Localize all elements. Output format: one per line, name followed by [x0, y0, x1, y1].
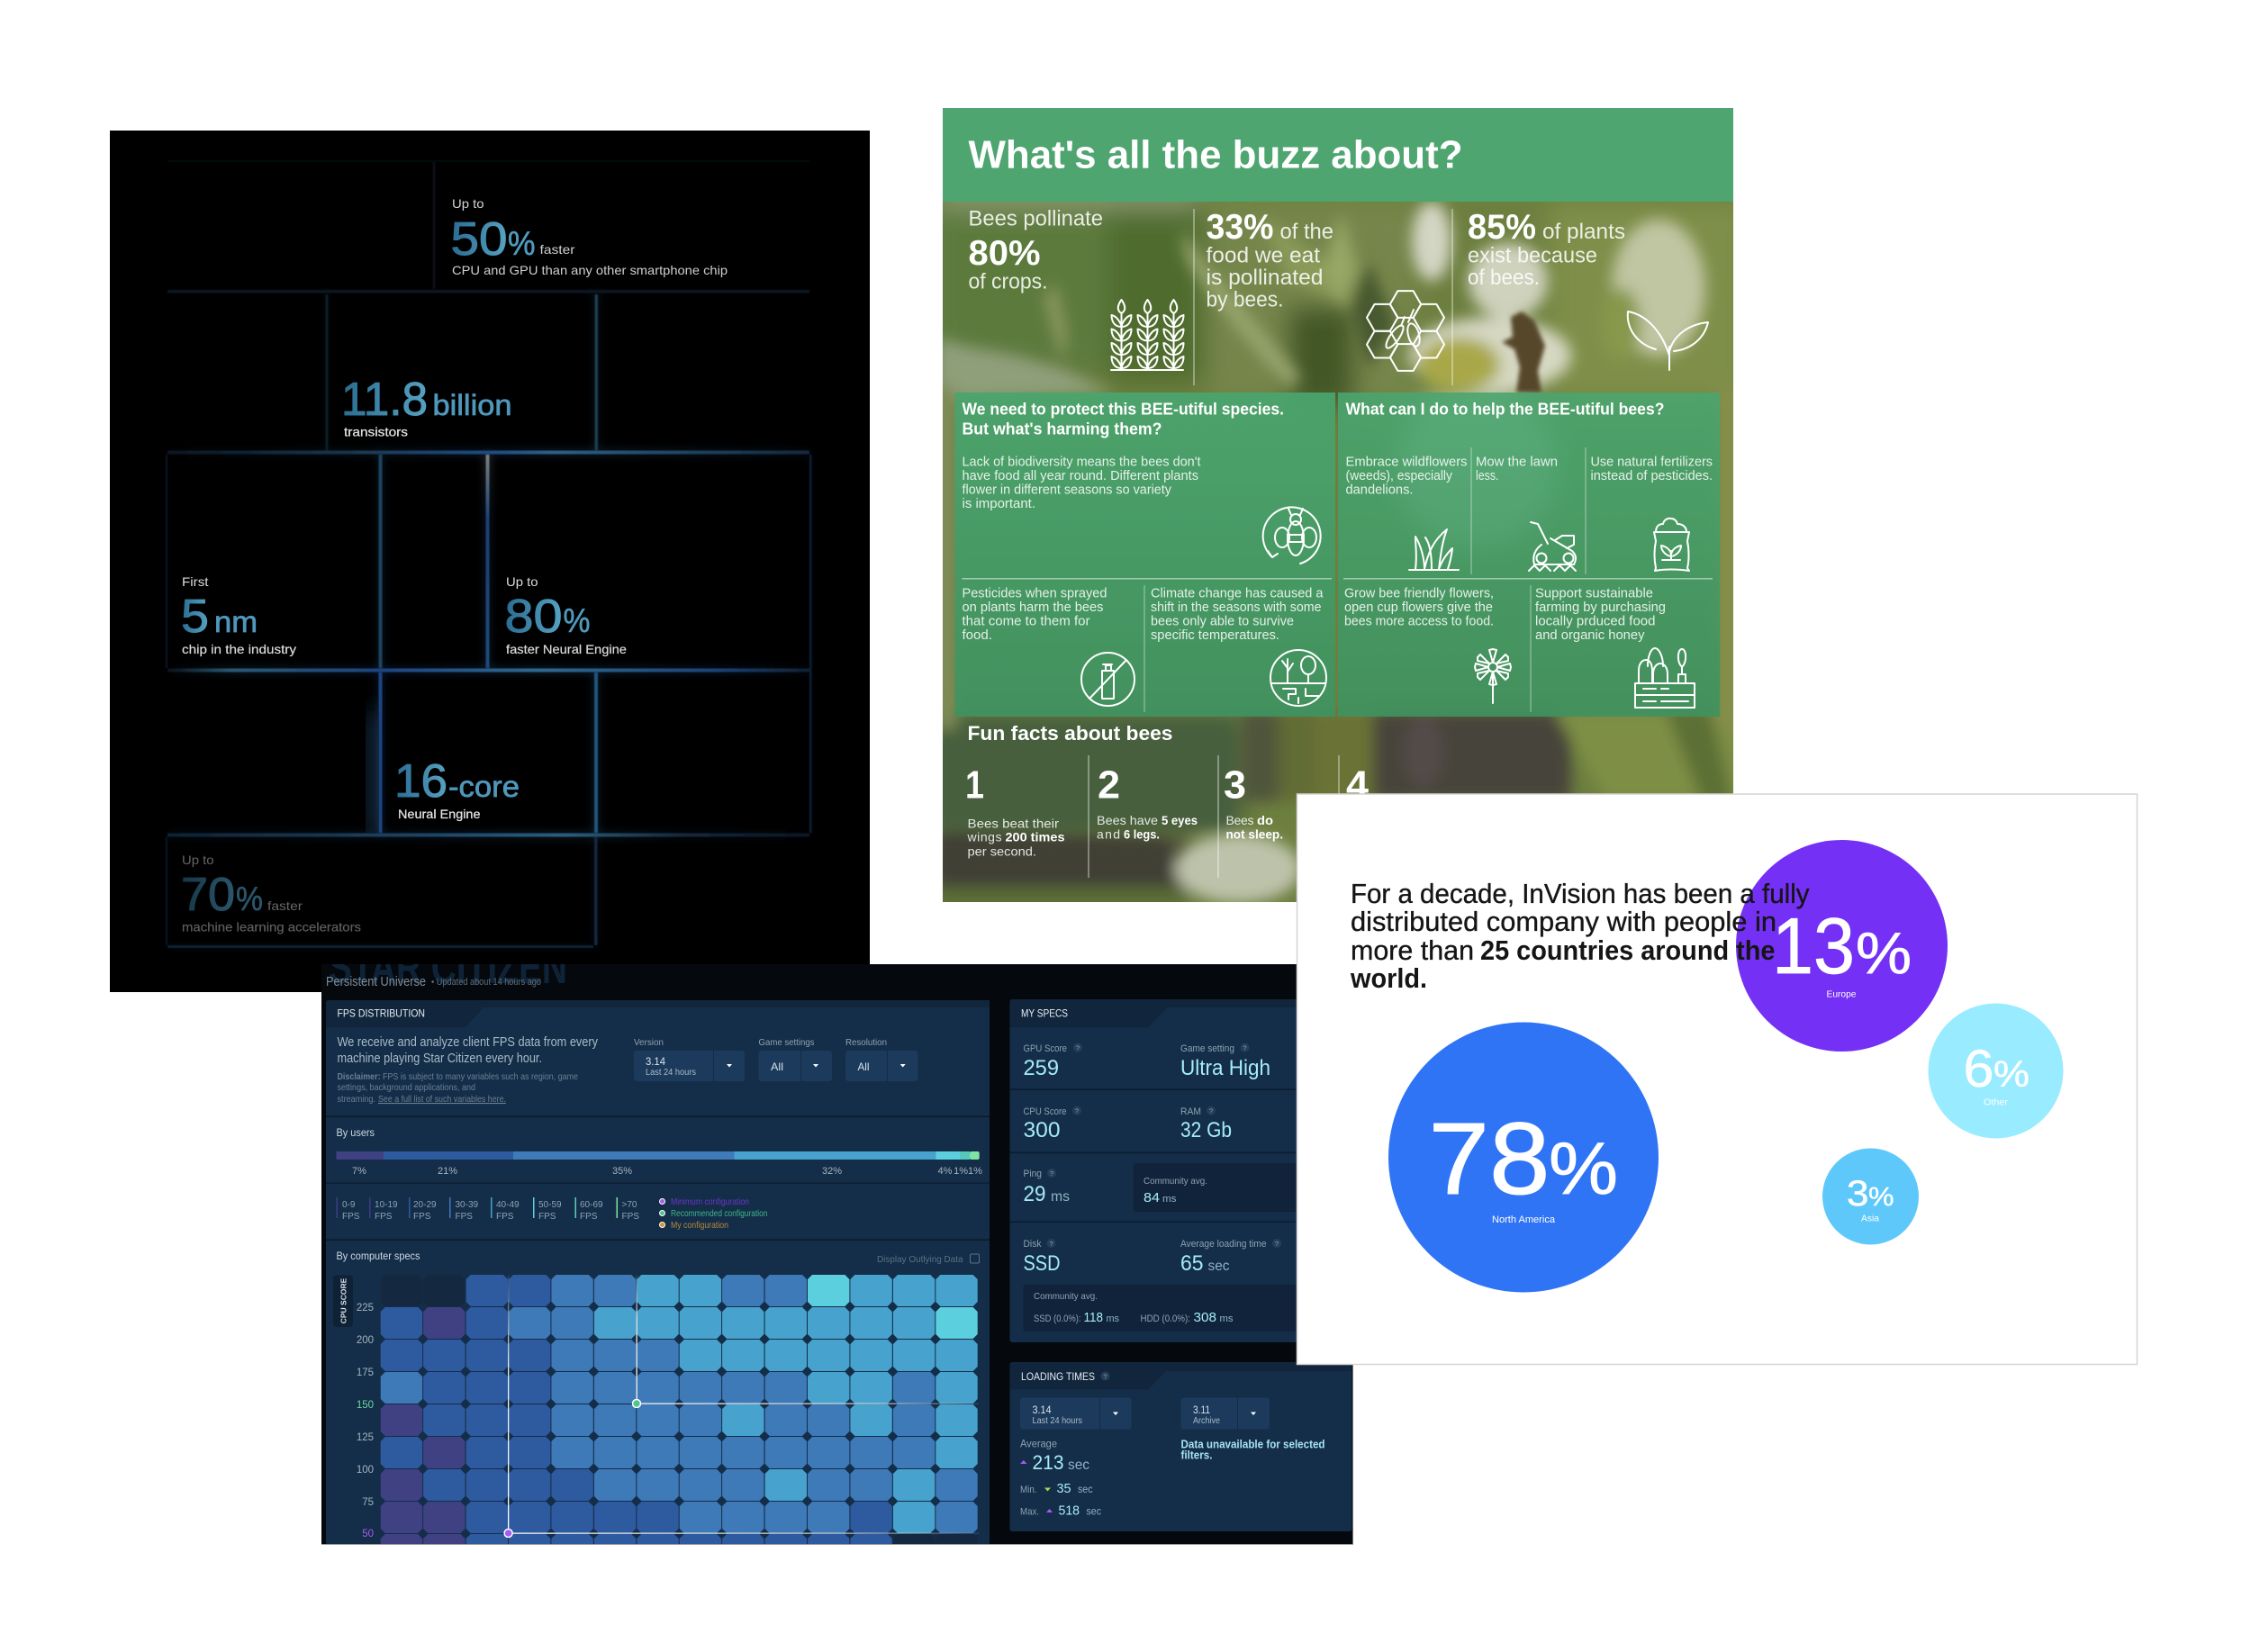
spec: average loading time: ?: [1275, 1240, 1279, 1248]
chart: by users stacked bar: 1%1%: [954, 1166, 982, 1177]
intro statement: world.: [1350, 962, 1427, 994]
chart: by computer specs heatmap: 225: [357, 1303, 374, 1313]
stat: 80 percent of crops: 80%: [969, 234, 1041, 273]
circle: Other 6 percent: Other: [1984, 1098, 2009, 1107]
spec: CPU score: ?: [1075, 1107, 1079, 1115]
text: natural fertilizers: [1590, 454, 1713, 483]
circle: Asia 3 percent: [1822, 1149, 1919, 1244]
stat: 80 percent: 80: [504, 591, 562, 643]
spec: CPU score: [1024, 1106, 1081, 1137]
stat: first 5 nm: nm: [214, 605, 258, 638]
circle: Other 6 percent: %: [1993, 1053, 2030, 1095]
stat: first 5 nm: [181, 574, 296, 656]
stat: 33 percent of food: by bees.: [1207, 288, 1284, 311]
fact 3: Bees: [1226, 813, 1253, 827]
legend: configurations: Minimum configuration: [671, 1196, 749, 1207]
stat: 80 percent: Up to: [506, 574, 538, 589]
intro text: Disclaimer: FPS is subject to many variables such as region, game: [337, 1071, 578, 1082]
intro statement: more than: [1351, 934, 1474, 966]
circle: North America 78 percent: %: [1549, 1128, 1618, 1210]
loading stats: [1020, 1439, 1101, 1518]
chart: by users stacked bar: 21%: [438, 1166, 457, 1177]
community average ping: [1134, 1163, 1297, 1212]
data unavailable note: [1181, 1440, 1324, 1458]
spec: CPU score: CPU Score: [1023, 1106, 1066, 1117]
icon: fertilizer bag: [1654, 519, 1689, 571]
filter: game settings: All: [771, 1061, 783, 1073]
intro text: settings, background applications, and: [337, 1082, 475, 1093]
spec: disk: Disk: [1023, 1239, 1042, 1250]
stat: 33 percent of food: 33%: [1207, 208, 1273, 247]
panel: loading times: [1010, 1362, 1352, 1531]
intro text: streaming.: [337, 1094, 375, 1105]
text: climate change: specific temperatures.: [1151, 627, 1279, 643]
legend: FPS ranges: >70: [621, 1200, 637, 1210]
filter: game settings: [758, 1037, 832, 1081]
chart: by computer specs heatmap: By computer specs: [337, 1250, 420, 1262]
page title: Persistent Universe: [326, 974, 426, 989]
fact 1: 200 times: [1005, 830, 1065, 844]
fact 1: wings: [967, 830, 1001, 844]
legend: FPS ranges: 20-29: [413, 1200, 437, 1210]
panel: InVision distributed company: [1297, 794, 2138, 1365]
spec: ping: ?: [1050, 1169, 1053, 1178]
panel: FPS distribution: FPS DISTRIBUTION: [337, 1007, 425, 1019]
legend: FPS ranges: 60-69: [580, 1200, 603, 1210]
text: sustainable farming: and organic honey: [1535, 627, 1645, 643]
text: wildflowers: dandelions.: [1345, 483, 1414, 497]
text: sustainable farming: [1535, 585, 1666, 643]
icon: bee cycle: [1263, 507, 1321, 564]
stat: 70 percent (dim): Up to: [182, 853, 214, 867]
heading: We need to protect this BEE-utiful species.: [962, 400, 1284, 418]
filter: version: 3.14: [646, 1055, 665, 1068]
text: pesticides: food.: [962, 627, 992, 643]
legend: FPS ranges: 30-39: [456, 1200, 479, 1210]
legend: FPS ranges: FPS: [621, 1212, 639, 1222]
fact 1: [965, 763, 1065, 859]
legend: FPS ranges: 10-19: [375, 1200, 398, 1210]
page title: STAR CITIZEN: [329, 942, 567, 994]
text: pesticides: [962, 585, 1107, 643]
filter: resolution: [845, 1037, 918, 1081]
panel: chip specifications: [110, 131, 870, 992]
heading: [962, 400, 1284, 438]
legend: configurations: [659, 1196, 768, 1231]
fact 2: [1097, 763, 1198, 841]
loading stats: 35: [1057, 1481, 1071, 1496]
intro text: We receive and analyze client FPS data from every: [337, 1034, 598, 1050]
stat: 16-core neural engine: Neural Engine: [398, 807, 481, 821]
text: pesticides: Pesticides when sprayed: [962, 585, 1107, 601]
chart: by users stacked bar: By users: [337, 1126, 375, 1139]
fact 4: 4: [1346, 763, 1370, 807]
text: biodiversity: [962, 454, 1201, 511]
chart: by computer specs heatmap: Display Outlying Data: [877, 1254, 963, 1265]
spec: disk: ?: [1049, 1240, 1053, 1248]
legend: FPS ranges: FPS: [342, 1212, 360, 1222]
filter: version: [634, 1037, 745, 1081]
fact 3: [1224, 763, 1283, 841]
text: pesticides: on plants harm the bees: [962, 600, 1104, 615]
panel: what's harming bees: [954, 393, 1335, 717]
icon: climate globe: [1270, 650, 1326, 706]
dropdown: version 3.14: 3.14: [1032, 1404, 1052, 1416]
stat: 50 percent: 50: [450, 213, 508, 266]
legend: FPS ranges: 40-49: [496, 1200, 520, 1210]
spec: average loading time: 65: [1180, 1251, 1203, 1276]
icon: honeycomb bee: [1367, 291, 1444, 371]
chart: by users stacked bar: 32%: [822, 1166, 842, 1177]
data unavailable note: Data unavailable for selected: [1181, 1437, 1325, 1451]
icon: grass: [1409, 529, 1459, 570]
chart: by users stacked bar: 4%: [938, 1166, 953, 1177]
dropdown: version 3.11: [1181, 1397, 1270, 1430]
icon: wheat: [1111, 300, 1183, 370]
chart: by computer specs heatmap: 200: [357, 1335, 374, 1346]
text: grow flowers: Grow bee friendly flowers,: [1344, 585, 1494, 601]
dropdown: version 3.14: [1020, 1397, 1131, 1430]
circle: North America 78 percent: [1388, 1023, 1659, 1293]
stat text: Europe: [1772, 901, 1912, 999]
text: mow less: less.: [1476, 468, 1498, 483]
spec: RAM: 32 Gb: [1180, 1118, 1232, 1142]
loading stats: Average: [1020, 1439, 1057, 1449]
text: sustainable farming: Support sustainable: [1535, 585, 1653, 601]
spec: average loading time: Average loading time: [1180, 1239, 1266, 1250]
intro statement: [1350, 878, 1810, 994]
title: What's all the buzz about?: [969, 133, 1462, 176]
legend: configurations: My configuration: [671, 1220, 728, 1231]
intro text: machine playing Star Citizen every hour.: [337, 1051, 542, 1066]
text: biodiversity: is important.: [962, 496, 1035, 511]
spec: game setting: [1180, 1043, 1270, 1080]
fun facts about bees: [965, 722, 1370, 878]
text: wildflowers: Embrace wildflowers: [1345, 454, 1468, 470]
text: sustainable farming: farming by purchasing: [1535, 600, 1666, 615]
legend: FPS ranges: FPS: [375, 1212, 393, 1222]
panel: my specs: [1010, 999, 1297, 1342]
stat: 16-core neural engine: 16: [394, 755, 447, 808]
chart: by computer specs heatmap: 75: [362, 1497, 374, 1508]
legend: FPS ranges: [337, 1197, 639, 1219]
stat: 80 percent of crops: Bees pollinate: [969, 207, 1103, 230]
text: grow flowers: open cup flowers give the: [1344, 600, 1493, 615]
stat: 16-core neural engine: -core: [448, 770, 520, 803]
stat: 50 percent: Up to: [452, 196, 484, 211]
intro statement: distributed company with people in: [1351, 906, 1776, 937]
stat text: Europe: 13: [1772, 901, 1855, 990]
chart: by computer specs heatmap: CPU SCORE: [339, 1277, 348, 1323]
spec: disk: [1024, 1239, 1060, 1270]
circle: Other 6 percent: [1929, 1003, 2064, 1138]
stat: 50 percent: %: [508, 225, 535, 262]
community average ping: ms: [1162, 1194, 1177, 1205]
stat: 16-core neural engine: [394, 755, 520, 821]
stat: first 5 nm: 5: [181, 591, 209, 643]
fact 1: 1: [965, 763, 984, 807]
icon: seedling: [1628, 311, 1708, 370]
header bar: [943, 108, 1733, 202]
legend: FPS ranges: 0-9: [342, 1200, 356, 1210]
community average disk: Community avg.: [1034, 1291, 1098, 1302]
filter: version: Last 24 hours: [646, 1068, 696, 1078]
panel: my specs: MY SPECS: [1021, 1007, 1068, 1019]
circle: North America 78 percent: North America: [1492, 1214, 1556, 1225]
circle: Asia 3 percent: Asia: [1861, 1214, 1879, 1224]
chart: by users stacked bar: 35%: [612, 1166, 632, 1177]
chart: by computer specs heatmap: 50: [362, 1529, 374, 1539]
spec: ping: Ping: [1023, 1169, 1042, 1179]
stat: 85 percent of plants: exist because: [1468, 243, 1597, 268]
spec: ping: [1024, 1169, 1070, 1201]
circle: Europe 13 percent: [1736, 840, 1948, 1052]
fact 2: Bees have: [1097, 813, 1158, 827]
text: climate change: [1151, 585, 1324, 643]
stat: 11.8 billion transistors: transistors: [344, 425, 408, 439]
panel: Star Citizen dashboard: [321, 942, 1354, 1566]
chart: by users stacked bar: 7%: [352, 1166, 366, 1177]
stat text: Europe: %: [1856, 920, 1912, 986]
spec: game setting: Ultra High: [1180, 1056, 1270, 1080]
intro statement: 25 countries around the: [1480, 934, 1776, 966]
panel: loading times: LOADING TIMES: [1021, 1370, 1095, 1383]
text: biodiversity: flower in different seasons so variety: [962, 483, 1171, 497]
background photo of bee on flower: [927, 185, 1747, 906]
community average disk: ms: [1106, 1313, 1119, 1324]
text: sustainable farming: locally prduced food: [1535, 614, 1655, 628]
stat: 70 percent (dim): %: [236, 880, 263, 917]
spec: RAM: ?: [1209, 1107, 1213, 1115]
text: biodiversity: have food all year round. Different plants: [962, 468, 1198, 483]
circle: Other 6 percent: 6: [1963, 1040, 1993, 1098]
stat: 80 percent of crops: [969, 207, 1103, 293]
heading: What can I do to help the BEE-utiful bees?: [1345, 400, 1664, 418]
text: mow less: Mow the lawn: [1476, 454, 1558, 470]
community average disk: ms: [1219, 1313, 1234, 1324]
icon: flower: [1475, 649, 1511, 703]
configuration crosshair lines: [504, 1275, 980, 1538]
spec: RAM: [1181, 1106, 1232, 1137]
stat: 33 percent of food: is pollinated: [1207, 266, 1324, 290]
dropdown: version 3.14: Last 24 hours: [1032, 1416, 1082, 1426]
stat text: Europe: Europe: [1826, 990, 1857, 999]
stat: 33 percent of food: food we eat: [1207, 243, 1320, 268]
icon: produce crate: [1635, 648, 1695, 708]
fact 1: per second.: [967, 844, 1036, 859]
spec: game setting: Game setting: [1180, 1043, 1234, 1054]
chart: by computer specs heatmap: 125: [357, 1432, 374, 1443]
intro text: See a full list of such variables here.: [378, 1094, 506, 1105]
stat: 80 percent of crops: of crops.: [969, 270, 1048, 293]
legend: FPS ranges: FPS: [496, 1212, 514, 1222]
spec: GPU score: ?: [1076, 1044, 1080, 1052]
circle: North America 78 percent: 78: [1428, 1102, 1550, 1215]
community average disk: 118: [1084, 1310, 1103, 1325]
stat: first 5 nm: chip in the industry: [182, 642, 296, 656]
loading stats: 213: [1032, 1451, 1064, 1474]
chart: by computer specs heatmap: 100: [357, 1465, 374, 1476]
fact 3: not sleep.: [1226, 826, 1283, 841]
stat: 70 percent (dim): machine learning accelerators: [182, 920, 361, 934]
spec: RAM: RAM: [1180, 1106, 1201, 1117]
loading stats: sec: [1068, 1458, 1089, 1473]
legend: configurations: Recommended configuration: [671, 1208, 768, 1219]
text: grow flowers: [1344, 585, 1494, 628]
stat: 50 percent: faster: [540, 242, 575, 257]
stat: 85 percent of plants: of bees.: [1468, 266, 1540, 290]
heading: But what's harming them?: [962, 420, 1162, 438]
panel: bee infographic: [927, 108, 1747, 906]
spec: ping: 29: [1023, 1182, 1046, 1206]
text: natural fertilizers: instead of pesticides.: [1590, 468, 1713, 483]
stat: 50 percent: [450, 196, 728, 277]
fact 2: 5 eyes: [1162, 813, 1198, 827]
loading stats: sec: [1078, 1485, 1093, 1495]
page title: • Updated about 14 hours ago: [431, 977, 541, 988]
fact 2: and: [1097, 826, 1120, 841]
icon: no spray: [1081, 653, 1135, 706]
community average disk: SSD (0.0%):: [1034, 1313, 1080, 1324]
loading stats: sec: [1086, 1507, 1101, 1518]
dropdown: version 3.11: 3.11: [1193, 1404, 1210, 1416]
circle: Asia 3 percent: %: [1868, 1183, 1894, 1212]
legend: FPS ranges: 50-59: [538, 1200, 562, 1210]
stat: 80 percent: [504, 574, 627, 656]
legend: FPS ranges: FPS: [456, 1212, 473, 1222]
panel: how to help bees: [1338, 393, 1720, 717]
legend: FPS ranges: FPS: [580, 1212, 598, 1222]
fact 3: 3: [1224, 763, 1246, 807]
community average ping: Community avg.: [1144, 1176, 1207, 1187]
icon: lawn mower: [1529, 522, 1576, 571]
text: pesticides: that come to them for: [962, 614, 1090, 628]
stat: 80 percent: faster Neural Engine: [506, 642, 627, 656]
tab header: [326, 1000, 990, 1027]
text: biodiversity: Lack of biodiversity means the bees don't: [962, 454, 1201, 470]
panel: loading times: ?: [1103, 1372, 1107, 1381]
text: wildflowers: [1345, 454, 1468, 497]
stat: 85 percent of plants: [1468, 208, 1625, 290]
spec: GPU score: [1024, 1043, 1082, 1075]
intro statement: For a decade, InVision has been a fully: [1351, 878, 1810, 909]
spec: average loading time: sec: [1208, 1259, 1230, 1274]
spec: CPU score: 300: [1023, 1118, 1061, 1142]
community average disk: [1023, 1285, 1297, 1332]
spec: GPU score: 259: [1023, 1056, 1059, 1080]
page title: [327, 964, 565, 987]
loading stats: Min.: [1020, 1485, 1037, 1495]
stat: first 5 nm: First: [182, 574, 209, 589]
stat: 33 percent of food: of the: [1280, 220, 1333, 244]
legend: FPS ranges: FPS: [413, 1212, 431, 1222]
text: mow less: [1476, 454, 1558, 483]
stat: 11.8 billion transistors: billion: [432, 389, 511, 421]
filter: game settings: Game settings: [758, 1037, 814, 1048]
spec: average loading time: [1180, 1239, 1281, 1270]
community average ping: 84: [1144, 1190, 1160, 1205]
chart: by computer specs heatmap: 150: [357, 1400, 374, 1411]
legend: FPS ranges: FPS: [538, 1212, 556, 1222]
stat: 11.8 billion transistors: [341, 374, 511, 439]
tile grid glowing seams: [166, 160, 812, 948]
loading stats: 518: [1059, 1503, 1080, 1518]
community average disk: HDD (0.0%):: [1140, 1313, 1190, 1324]
fact 3: do: [1257, 813, 1273, 827]
panel: FPS distribution: [326, 1000, 990, 1566]
data unavailable note: filters.: [1181, 1448, 1212, 1462]
chart: by computer specs heatmap: 175: [357, 1368, 374, 1378]
stat: 85 percent of plants: 85%: [1468, 208, 1536, 247]
dropdown: version 3.11: Archive: [1193, 1416, 1220, 1426]
stat: 70 percent (dim): faster: [267, 898, 303, 913]
stat: 70 percent (dim): [181, 853, 361, 934]
stat: 85 percent of plants: of plants: [1542, 220, 1625, 244]
text: natural fertilizers: Use natural fertilizers: [1590, 454, 1713, 470]
community average disk: 308: [1194, 1310, 1216, 1325]
intro text: [337, 1034, 598, 1105]
spec: GPU score: GPU Score: [1023, 1043, 1067, 1054]
spec: disk: SSD: [1023, 1251, 1061, 1276]
stat: 33 percent of food: [1207, 208, 1333, 311]
filter: resolution: All: [857, 1061, 870, 1073]
text: grow flowers: bees more access to food.: [1344, 614, 1494, 628]
stat: 50 percent: CPU and GPU than any other smartphone chip: [452, 263, 728, 277]
text: wildflowers: (weeds), especially: [1345, 468, 1452, 483]
fact 2: 6 legs.: [1124, 826, 1160, 841]
heading: Fun facts about bees: [967, 722, 1172, 745]
spec: game setting: ?: [1243, 1044, 1247, 1052]
stat: 70 percent (dim): 70: [181, 869, 235, 921]
loading stats: Max.: [1020, 1507, 1039, 1518]
text: climate change: Climate change has caused a: [1151, 585, 1324, 601]
chart: by users stacked bar: [337, 1126, 982, 1177]
text: climate change: shift in the seasons with some: [1151, 600, 1322, 615]
filter: version: Version: [634, 1037, 664, 1048]
fact 1: Bees beat their: [967, 816, 1059, 830]
fact 2: 2: [1098, 763, 1120, 807]
stat: 80 percent: %: [564, 602, 591, 639]
chart: by computer specs heatmap: [333, 1250, 980, 1566]
stat: 11.8 billion transistors: 11.8: [341, 374, 428, 426]
spec: ping: ms: [1051, 1189, 1070, 1205]
filter: resolution: Resolution: [845, 1037, 887, 1048]
text: climate change: bees only able to survive: [1151, 614, 1294, 628]
circle: Asia 3 percent: 3: [1847, 1174, 1869, 1214]
